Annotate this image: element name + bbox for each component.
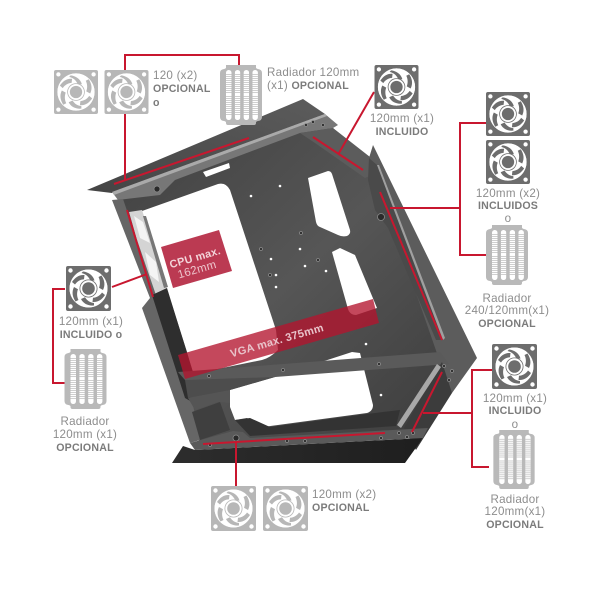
top rail highlight bbox=[112, 114, 327, 195]
white slot bbox=[203, 163, 230, 177]
label: right radiator: OPCIONAL bbox=[478, 318, 536, 330]
lower block bbox=[188, 390, 230, 410]
right bracket edge bbox=[377, 165, 445, 340]
label: top included fan: INCLUIDO bbox=[376, 126, 428, 138]
top flange bbox=[87, 99, 325, 193]
callout: CPU max bbox=[161, 230, 232, 288]
label: top radiator: (x1) OPCIONAL bbox=[267, 79, 349, 92]
chassis bbox=[87, 99, 477, 463]
icon: fan lower right bbox=[492, 344, 537, 389]
label: lower right fan: o bbox=[512, 418, 518, 431]
top rail bbox=[112, 114, 338, 200]
white cutout: upper right bbox=[308, 171, 350, 236]
white cutout: motherboard opening bbox=[142, 184, 278, 374]
label: right fans: INCLUIDOS bbox=[478, 200, 538, 212]
label: bottom fans bbox=[312, 488, 376, 514]
right plate bbox=[369, 145, 477, 393]
rear fan bbox=[129, 210, 168, 296]
bottom right brace bbox=[404, 362, 452, 450]
icon: fan bottom 2 bbox=[263, 486, 308, 531]
label: lower right radiator: OPCIONAL bbox=[486, 519, 544, 531]
label: lower right fan: INCLUIDO bbox=[489, 405, 541, 417]
icon: fan right 2 bbox=[486, 140, 530, 184]
bottom right drive rail bbox=[397, 364, 441, 428]
label: left fan: INCLUIDO o bbox=[60, 329, 123, 341]
label: left fan: 120mm (x1) bbox=[59, 315, 123, 328]
label: lower right fan bbox=[483, 392, 547, 431]
icon: radiator left bbox=[64, 349, 106, 409]
label: right fans: o bbox=[505, 212, 511, 225]
icon: radiator right bbox=[486, 225, 528, 285]
label: left radiator: 120mm (x1) bbox=[53, 428, 117, 441]
label: top fans bbox=[153, 69, 211, 109]
back plate bbox=[120, 128, 448, 444]
label: top included fan: 120mm (x1) bbox=[370, 112, 434, 125]
lower panel bbox=[235, 410, 400, 436]
bottom base bbox=[172, 428, 428, 463]
label: top fans: 120 (x2) bbox=[153, 69, 198, 82]
right bracket bbox=[368, 158, 443, 340]
plate holes bbox=[250, 185, 382, 396]
icon: fan top left bbox=[54, 70, 98, 114]
white cutout: middle right bbox=[332, 248, 377, 315]
cross rail bbox=[178, 352, 449, 380]
PSU shroud bbox=[192, 402, 230, 440]
screws bbox=[154, 120, 454, 446]
label: top fans: o bbox=[153, 97, 160, 109]
label: lower right radiator bbox=[485, 493, 545, 531]
label: right radiator bbox=[465, 292, 549, 330]
label: right fans bbox=[476, 187, 540, 225]
icon: fan bottom 1 bbox=[211, 486, 256, 531]
label: bottom fans: 120mm (x2) bbox=[312, 488, 376, 501]
callout: CPU max: CPU max. bbox=[168, 245, 222, 271]
left pillar bbox=[112, 199, 200, 443]
label: top radiator bbox=[267, 66, 359, 92]
label: right radiator: Radiador bbox=[482, 292, 532, 305]
icon: radiator top bbox=[220, 65, 262, 125]
icon: fan left bbox=[66, 266, 111, 311]
left dark strip bbox=[152, 288, 193, 402]
callout: VGA max bbox=[178, 299, 379, 379]
icon: radiator lower right bbox=[493, 430, 535, 489]
white cutout: lower opening bbox=[230, 352, 373, 427]
callout: CPU max: 162mm bbox=[176, 259, 218, 281]
label: lower right radiator: 120mm(x1) bbox=[485, 505, 545, 518]
label: lower right radiator: Radiador bbox=[490, 493, 540, 506]
label: left fan bbox=[59, 315, 123, 341]
label: lower right fan: 120mm (x1) bbox=[483, 392, 547, 405]
connector lines bbox=[53, 55, 492, 486]
icon: fan top included bbox=[374, 65, 418, 109]
label: left radiator bbox=[53, 415, 117, 454]
top right band bbox=[300, 128, 377, 178]
label: top radiator: Radiador 120mm bbox=[267, 66, 359, 79]
label: left radiator: Radiador bbox=[60, 415, 110, 428]
label: right radiator: 240/120mm(x1) bbox=[465, 304, 549, 317]
icon: fan right 1 bbox=[486, 92, 530, 136]
callout: VGA max: VGA max. 375mm bbox=[229, 322, 325, 360]
label: bottom fans: OPCIONAL bbox=[312, 502, 370, 514]
label: top included fan bbox=[370, 112, 434, 138]
icon: fan top second bbox=[104, 70, 148, 114]
label: left radiator: OPCIONAL bbox=[56, 442, 114, 454]
label: right fans: 120mm (x2) bbox=[476, 187, 540, 200]
cross rail lower bbox=[185, 377, 275, 398]
bottom rail bbox=[190, 428, 428, 450]
label: top fans: OPCIONAL bbox=[153, 83, 211, 95]
